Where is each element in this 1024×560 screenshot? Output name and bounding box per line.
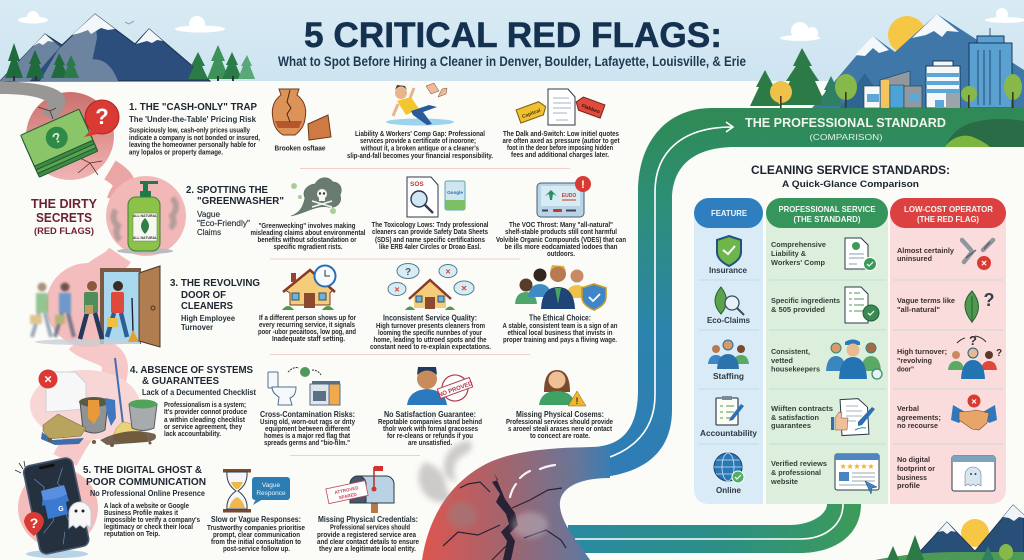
- heading: 2. SPOTTING THE: [186, 184, 268, 196]
- heading: [129, 101, 257, 124]
- text block: The Dalk and-Switch: Low initiel quotes: [503, 131, 619, 138]
- icon: stable team with shield: [515, 265, 606, 310]
- heading: [186, 184, 284, 207]
- text block: a within cleading checklist: [164, 417, 246, 424]
- text block: spreads germs and "bio-film.": [264, 440, 350, 447]
- text block: Slow or Vague Responses:: [211, 515, 301, 524]
- text block: specific mgradient rists.: [274, 244, 343, 251]
- text block: Volvible Organic Compounds (VDES) that can: [496, 237, 626, 244]
- column: feature: Accountability: [700, 429, 757, 438]
- icon: money stack with question mark: [21, 100, 119, 177]
- text block: ethical local business that invists in: [508, 330, 612, 337]
- text block: [347, 131, 493, 160]
- cracked road transition: [418, 440, 610, 560]
- column: low-cost operator: Almost certainly: [897, 246, 955, 255]
- right city and mountain scene: [750, 8, 1024, 108]
- table title: CLEANING SERVICE STANDARDS:: [751, 165, 950, 177]
- text block: Business Profile makes it: [104, 510, 179, 517]
- text block: be ills more eodcamiated iodoes than: [504, 244, 618, 251]
- heading: & GUARANTEES: [142, 375, 219, 387]
- text block: indicate a company is not bonded or insured,: [129, 135, 260, 142]
- text block: Inconsistent Service Quality:: [383, 314, 477, 322]
- text block: A stable, consistent team is a sign of an: [502, 323, 618, 330]
- text block: fees and additional charges later.: [511, 152, 609, 159]
- icon: worried woman with warning triangle: [539, 370, 586, 406]
- text block: [258, 315, 356, 343]
- row dividers: [699, 280, 1003, 444]
- icon: toilet, germ and stove: [268, 367, 340, 405]
- column: professional service: guarantees: [771, 421, 811, 430]
- side label: the dirty secrets: (RED FLAGS): [34, 226, 94, 237]
- text block: provide a registered service area: [317, 532, 416, 539]
- text block: Professional services should: [330, 524, 410, 532]
- text block: lack accountability.: [164, 431, 221, 438]
- text block: foot in the deor before imposing hidden: [507, 145, 613, 152]
- panel: red flag 1 cash-only trap: [21, 83, 620, 177]
- column: professional service: [766, 198, 888, 504]
- icon: unhappy client with stamp: NO PROVED: [438, 381, 474, 399]
- column: professional service: & satisfaction: [771, 413, 819, 422]
- text block: benefits without sdostandation or: [258, 237, 357, 244]
- text block: equipment between different: [265, 426, 351, 433]
- icon: refused handshake: ×: [971, 396, 977, 408]
- icon: eco leaf and magnifier: [715, 287, 744, 315]
- column: feature: [694, 198, 763, 504]
- icon: cleaners walking through an open door: [30, 266, 160, 347]
- heading: [83, 464, 206, 488]
- icon: dirty cleaning supplies: [38, 358, 157, 447]
- icon: eco cleaner bottle with smoke: ALL NATURAL: [133, 236, 158, 240]
- subheading: Claims: [197, 227, 221, 237]
- header sky: [0, 0, 1024, 81]
- side label: the dirty secrets: THE DIRTY: [31, 197, 98, 211]
- icon: vague response speech bubble: [252, 477, 290, 505]
- heading: CLEANERS: [181, 300, 233, 312]
- heading: "GREENWASHER": [197, 195, 284, 207]
- text block: [502, 314, 618, 344]
- text block: [317, 515, 419, 553]
- icon: contract with tags: Flabbeo: [581, 103, 601, 115]
- subheading: "Eco-Friendly": [197, 218, 250, 228]
- text block: services provide a certificate of inoorone;: [360, 138, 476, 145]
- column: professional service: Comprehensive: [771, 240, 826, 249]
- icon: website with star reviews: [835, 454, 879, 494]
- icon: air quality monitor with alert: [537, 176, 591, 217]
- column: low-cost operator: [890, 198, 1006, 504]
- left mountain scene: [0, 11, 255, 81]
- text block: and clear contact details to ensure: [317, 539, 419, 546]
- column: feature: Staffing: [713, 372, 744, 381]
- text block: It's provider connot produce: [164, 409, 247, 416]
- text block: [164, 402, 247, 438]
- column: professional service: Liability &: [771, 249, 806, 258]
- column: low-cost operator: no recourse: [897, 421, 938, 430]
- text block: The VOC Throst: Many "all-natural": [509, 222, 613, 229]
- text block: High turnover presents cleaners from: [376, 323, 485, 330]
- text block: Liability & Workers' Comp Gap: Professional: [355, 131, 485, 138]
- text block: without it, a broken antique or a cleaner's: [360, 146, 479, 152]
- icon: insurance shield: [717, 236, 741, 266]
- text block: Missing Physical Cosems:: [516, 410, 604, 419]
- icon: house with thought bubbles: ×: [461, 284, 467, 294]
- icon: house with thought bubbles: ×: [394, 284, 400, 294]
- side label: the dirty secrets: SECRETS: [36, 211, 92, 225]
- text block: any lopalos or property damage.: [129, 150, 223, 156]
- icon: empty browser with ghost: [952, 456, 995, 491]
- icon: air quality monitor with alert: !: [581, 179, 585, 191]
- column: low-cost operator: Verbal: [897, 404, 919, 413]
- icon: cracked phone with store, ghost and pin: [15, 457, 91, 558]
- icon: eco cleaner bottle with smoke: [113, 181, 176, 254]
- column: professional service: & 505 provided: [771, 305, 825, 314]
- green arch: the professional standard band: [570, 108, 1024, 478]
- icon: vetted housekeepers: [826, 340, 882, 379]
- text block: poor -ubor pecaitoos, low pog, and: [258, 329, 356, 336]
- icon: contract with tags: [516, 89, 605, 125]
- text block: [260, 410, 355, 447]
- icon: contract with tags: Capitcal: [521, 108, 542, 120]
- text block: leaving the homeowner personally hable for: [129, 142, 256, 149]
- icon: unhappy client with stamp: [407, 367, 477, 406]
- column: low-cost operator: uninsured: [897, 254, 932, 263]
- column: low-cost operator: footprint or: [897, 464, 935, 473]
- comparison table: [694, 198, 1006, 504]
- icon: broken chain: ×: [981, 258, 987, 270]
- icon: unknown replacement staff: ?: [969, 333, 977, 348]
- subheading: No Professional Online Presence: [90, 488, 205, 498]
- icon: vague response speech bubble: Responce: [256, 490, 286, 497]
- text block: home, leading to uttroed spots and the: [374, 337, 487, 344]
- icon: written contract with thumbs up: [831, 398, 875, 436]
- icon: ingredient checklist: [845, 287, 879, 323]
- icon: worried woman with warning triangle: !: [576, 396, 578, 406]
- heading: POOR COMMUNICATION: [86, 476, 206, 488]
- panel: red flag 4 absence of systems: [38, 358, 613, 447]
- column: feature: FEATURE: [711, 209, 748, 218]
- band heading: the professional standard: [745, 116, 946, 142]
- text block: Repotable companies stand behind: [378, 419, 482, 426]
- text block: The Ethical Choice:: [529, 314, 591, 322]
- column: low-cost operator: "revolving: [897, 356, 932, 365]
- column: professional service: vetted: [771, 356, 793, 365]
- text block: or service agreement, they: [164, 424, 242, 431]
- icon: accountability clipboard: [716, 396, 744, 425]
- icon: house with clock: [282, 266, 336, 310]
- text block: s aroeel steali arases nere or ontact: [508, 426, 613, 433]
- icon: money stack with question mark: ?: [50, 129, 64, 147]
- panel: red flag 5 digital ghost: [15, 457, 419, 558]
- icon: house with thought bubbles: ?: [405, 267, 411, 278]
- column: low-cost operator: business: [897, 473, 927, 482]
- heading: [130, 364, 253, 387]
- icon: house with thought bubbles: [388, 264, 474, 310]
- pink trail: the dirty secrets path: [0, 81, 186, 548]
- text block: Trustworthy companies prioritise: [207, 525, 305, 532]
- column: professional service: Wiiften contracts: [771, 404, 833, 413]
- text block: Using old, worn-out rags or dnty: [260, 419, 355, 426]
- bottom-right mountain scene: [875, 505, 1024, 560]
- column: professional service: (THE STANDARD): [794, 215, 861, 224]
- text block: cleaners can provide Safety Data Sheets: [372, 229, 488, 236]
- text block: [378, 410, 482, 447]
- text block: Inadequate staff setting.: [272, 336, 345, 343]
- text block: proper training and pays a fliving wage.: [503, 337, 617, 344]
- heading: 4. ABSENCE OF SYSTEMS: [130, 364, 253, 376]
- panel: red flag 3 revolving door: [30, 264, 618, 351]
- text block: [370, 314, 491, 351]
- icon: leaf with question mark: [965, 290, 994, 323]
- column: feature: Online: [716, 486, 741, 495]
- text block: Missing Physical Credentials:: [318, 515, 418, 524]
- title: 5 CRITICAL RED FLAGS:: [304, 16, 722, 55]
- icon: money stack with question mark: ?: [95, 104, 109, 129]
- text block: Cross-Contamination Risks:: [260, 410, 355, 419]
- subheading: Vague: [197, 209, 220, 219]
- icon: leaf with question mark: ?: [984, 290, 994, 310]
- text block: [207, 515, 305, 553]
- column: low-cost operator: LOW-COST OPERATOR: [904, 205, 993, 214]
- text block: [506, 410, 613, 440]
- column: professional service: website: [770, 477, 798, 486]
- text block: for re-cleans or refunds if you: [387, 433, 473, 440]
- column: professional service: & professional: [771, 468, 821, 477]
- icon: mailbox with stamp: [326, 466, 394, 513]
- icon: mailbox with stamp: ATTROVED: [334, 485, 360, 495]
- text block: shelf-stable products still cont harmful: [505, 229, 617, 236]
- text block: constant need to re-explain expectations.: [370, 344, 491, 351]
- icon: worker slipping: [386, 83, 454, 126]
- column: low-cost operator: door": [897, 364, 914, 374]
- icon: refused handshake: [951, 394, 997, 430]
- text block: they are a legitimate local entity.: [319, 546, 416, 553]
- text block: Professional services should provide: [506, 419, 613, 426]
- text block: to concect are roate.: [530, 433, 590, 440]
- text block: are unsatisfied.: [408, 440, 452, 447]
- text block: impossible to verify a company's: [104, 517, 200, 524]
- icon: dirty cleaning supplies: ×: [44, 372, 52, 386]
- column: low-cost operator: agreements;: [897, 413, 941, 422]
- icon: toxic cloud with skull: [291, 178, 341, 216]
- column: professional service: Verified reviews: [771, 459, 827, 468]
- icon: broken chain: [962, 240, 993, 270]
- column: feature: Eco-Claims: [707, 316, 750, 325]
- text block: slip-and-fall becomes your financial responsibility.: [347, 153, 493, 160]
- icon: broken vase: [272, 89, 331, 140]
- text block: post-service follow up.: [223, 546, 290, 553]
- icon: vague response speech bubble: Vague: [262, 482, 281, 489]
- column: professional service: housekeepers: [771, 364, 820, 374]
- lower return band: [568, 504, 861, 553]
- table title: A Quick-Glance Comparison: [782, 179, 919, 190]
- band heading: the professional standard: (COMPARISON): [810, 132, 883, 142]
- subheading: [181, 313, 235, 332]
- text block: misleading claims about environmental: [250, 230, 366, 237]
- icon: SOS sheet and certification badge: [407, 177, 465, 217]
- panel: red flag 2 greenwasher: [113, 176, 626, 258]
- column: professional service: PROFESSIONAL SERVICE: [778, 205, 876, 214]
- column: low-cost operator: "all-natural": [897, 305, 940, 314]
- text block: Professionalism is a system;: [164, 402, 246, 409]
- text block: from the initial consultation to: [211, 539, 301, 546]
- heading: The 'Under-the-Table' Pricing Risk: [129, 114, 256, 124]
- heading: 3. THE REVOLVING: [170, 277, 260, 289]
- text block: If a different person shows up for: [259, 315, 356, 322]
- text block: [250, 223, 366, 251]
- dividers: [270, 168, 570, 456]
- text block: (SDS) and name specific certifications: [375, 237, 485, 244]
- text block: A lack of a website or Google: [104, 503, 189, 510]
- text block: legitimacy or check their local: [104, 524, 193, 531]
- text block: No Satisfaction Guarantee:: [384, 410, 476, 419]
- icon: professional certificate: [845, 238, 876, 270]
- text block: [496, 222, 626, 258]
- column: professional service: Specific ingredients: [771, 296, 840, 305]
- text block: [104, 503, 200, 538]
- icon: online globe: [714, 453, 744, 483]
- text block: prompt, clear communication: [213, 532, 300, 539]
- icon: website with star reviews: ★★★★★: [840, 462, 874, 471]
- text block: The Toxicology Lows: Tndy professional: [372, 222, 489, 229]
- text block: tholr work with formal gracosses: [383, 426, 478, 433]
- text block: every recurring service, it signals: [259, 322, 355, 329]
- band heading: the professional standard: THE PROFESSIONAL STANDARD: [745, 116, 946, 130]
- heading: 1. THE "CASH-ONLY" TRAP: [129, 101, 257, 113]
- icon: mailbox with stamp: SPARED: [338, 492, 358, 500]
- subtitle: What to Spot Before Hiring a Cleaner in Denver, Boulder, Lafayette, Louisville, & Erie: [278, 54, 746, 69]
- text block: outdoors.: [547, 251, 575, 258]
- column: low-cost operator: (THE RED FLAG): [917, 215, 979, 224]
- icon: air quality monitor with alert: EUDO: [562, 193, 576, 199]
- subheading: Turnover: [181, 322, 214, 332]
- icon: cracked phone with store, ghost and pin: ?: [30, 515, 38, 531]
- column: low-cost operator: No digital: [897, 455, 930, 464]
- text block: reputation on Teip.: [104, 531, 160, 538]
- column: low-cost operator: Vague terms like: [897, 296, 955, 305]
- icon: hourglass: [223, 469, 251, 512]
- text block: homes is a major red flag that: [264, 433, 351, 440]
- subheading: Lack of a Decumented Checklist: [142, 387, 256, 397]
- text block: are often axed as pressure (autior to get: [502, 138, 620, 145]
- heading: 5. THE DIGITAL GHOST &: [83, 464, 202, 476]
- icon: cracked phone with store, ghost and pin: G: [58, 506, 64, 513]
- text block: [502, 131, 620, 159]
- text block: looming the specific nunnbes of your: [378, 330, 482, 337]
- heading: DOOR OF: [181, 289, 227, 301]
- column: low-cost operator: High turnover;: [897, 347, 947, 356]
- text block: "Greenwecking" involves making: [258, 223, 356, 230]
- text block: [129, 128, 260, 156]
- icon: staffing team: [708, 340, 749, 369]
- table title: [751, 165, 950, 190]
- text block: [372, 222, 489, 251]
- icon: eco cleaner bottle with smoke: ALL NATURAL: [133, 214, 158, 218]
- icon: unknown replacement staff: [948, 333, 1002, 379]
- heading: [170, 277, 260, 312]
- icon: unknown replacement staff: ?: [996, 348, 1002, 359]
- subheading: High Employee: [181, 313, 235, 323]
- caption: Brooken osftaae: [274, 146, 326, 152]
- column: low-cost operator: profile: [897, 481, 920, 490]
- icon: SOS sheet and certification badge: SOS: [410, 181, 424, 188]
- side label: the dirty secrets: [31, 197, 98, 237]
- subheading: [197, 209, 250, 237]
- column: professional service: Consistent,: [771, 347, 810, 356]
- column: feature: Insurance: [709, 266, 747, 275]
- icon: SOS sheet and certification badge: Google: [447, 190, 463, 195]
- icon: house with thought bubbles: ×: [445, 266, 451, 276]
- text block: like ERB 4aler Circles or Droao Easl.: [379, 244, 481, 251]
- column: professional service: Workers' Comp: [771, 258, 825, 267]
- text block: Suspiciously low, cash-only prices usually: [129, 128, 250, 134]
